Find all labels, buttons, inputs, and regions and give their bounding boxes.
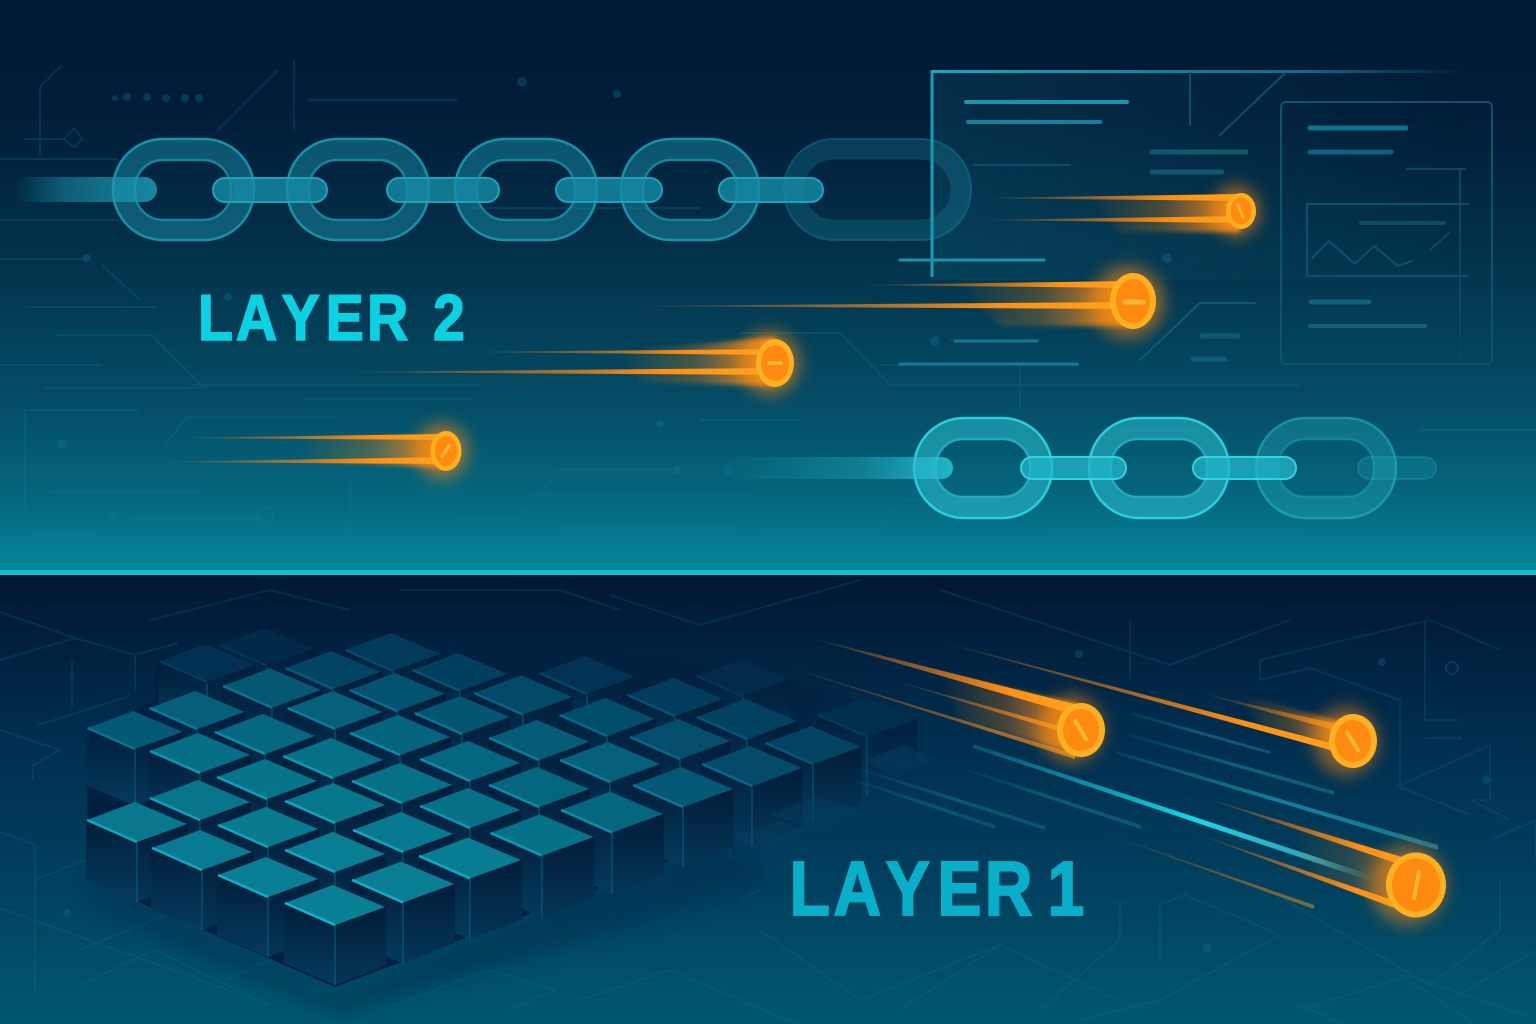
coin [1226, 193, 1256, 229]
window text lines [900, 73, 1285, 364]
coin [756, 339, 794, 387]
chain connector pills [15, 177, 823, 202]
heading: layer 1: LAYER 1 [789, 846, 1084, 932]
coin [1329, 714, 1377, 768]
chain link 2 [287, 139, 429, 240]
panel: layer 2 background [0, 0, 1536, 572]
ground shadow of block grid [90, 840, 780, 1015]
coin trail: centre [330, 331, 800, 395]
coin [1386, 852, 1446, 918]
chain: layer 2 lower [720, 418, 1436, 518]
panel: dashboard window [900, 70, 1465, 364]
chain link 3 [455, 139, 597, 240]
coin trail: lower left [150, 423, 468, 479]
faint far tiles [740, 745, 935, 845]
decorative nodes: layer 1 [63, 650, 1490, 953]
chain link 5 faded [784, 139, 971, 240]
chain: layer 2 upper [15, 139, 971, 240]
coin trail: layer 1 right [923, 637, 1378, 775]
panel: layer 1 background [0, 575, 1536, 1024]
coin [1057, 703, 1105, 757]
chain link 1 [113, 139, 254, 240]
decorative nodes [57, 77, 1172, 523]
speed lines: cyan [856, 712, 1438, 882]
coin trail: layer 1 large [1087, 795, 1446, 925]
panel: inner document [1281, 102, 1492, 364]
circuit pattern: layer 1 background [0, 580, 1536, 1024]
coin trail: top right [975, 185, 1260, 237]
lower chain link 2 [1089, 418, 1229, 518]
circuit pattern: layer 2 background [0, 60, 1536, 547]
coin trail: upper centre [610, 266, 1164, 338]
divider between layers [0, 570, 1536, 575]
coin [430, 431, 462, 471]
coin trail: layer 1 left [765, 635, 1105, 763]
lower chain link 3 [1256, 418, 1396, 518]
lower chain connector pills [720, 457, 1436, 479]
chain link 4 [621, 139, 759, 240]
coin [1110, 273, 1156, 329]
lower chain link 1 [914, 418, 1052, 518]
block grid: layer 1 [86, 628, 935, 987]
window frame [932, 70, 1465, 277]
heading: layer 2: LAYER 2 [198, 282, 465, 354]
